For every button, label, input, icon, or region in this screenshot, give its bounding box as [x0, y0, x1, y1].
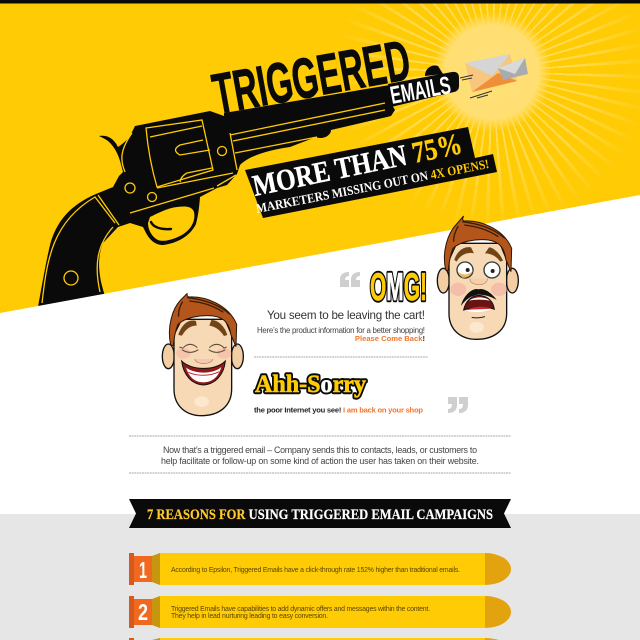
icon: flying envelopes: [460, 54, 528, 98]
trigger: [151, 222, 171, 229]
smiling eyes: [179, 344, 227, 352]
number tab: [129, 553, 134, 585]
cheeks: [176, 348, 231, 359]
bar cap: [485, 638, 499, 640]
heading text: 7 REASONS FOR USING TRIGGERED EMAIL CAMPAIGNS: [147, 507, 493, 523]
text: product information: Here’s the product information for a better shopping!: [257, 326, 425, 335]
laughing mouth: [182, 361, 225, 385]
text: please come back: Please Come Back!: [355, 334, 425, 343]
head: [449, 243, 507, 339]
cheeks: [450, 283, 507, 296]
character: laughing face: [162, 293, 243, 416]
speed lines: [460, 75, 492, 98]
bar: [160, 638, 485, 640]
reason 2: [129, 596, 511, 628]
number tab: [129, 596, 134, 628]
line one: Now that’s a triggered email – Company sends this to contacts, leads, or customers to: [163, 445, 477, 455]
sunburst rays: [341, 4, 640, 223]
bar cap: [485, 596, 511, 628]
headline: more than 75%: MORE THAN 75%: [250, 127, 465, 203]
tab fold: [152, 596, 160, 628]
hair strands: [454, 222, 505, 242]
dashed rule: [129, 472, 511, 474]
section heading banner: [129, 499, 511, 528]
reason text line one: Triggered Emails have capabilities to add dynamic offers and messages within the content.: [171, 606, 430, 613]
nose: [195, 359, 213, 363]
icon: opening quote: [340, 272, 360, 287]
character: worried face: [437, 216, 518, 339]
sun glow: [432, 12, 552, 132]
reason text line two: They help in lead nurturing leading to easy conversion.: [171, 613, 328, 620]
tab fold: [152, 638, 160, 640]
label shape: [388, 65, 459, 107]
number: 1: [139, 557, 147, 583]
label text: EMAILS: [388, 71, 453, 110]
ears: [162, 344, 243, 369]
fill: OMG!: [370, 266, 427, 309]
open mouth: [464, 295, 494, 312]
tab fold: [152, 553, 160, 585]
outline: OMG!: [370, 266, 427, 309]
chin highlight: [194, 396, 209, 407]
dashed divider: [254, 356, 428, 358]
small envelope: [498, 58, 528, 80]
bar cap: [485, 553, 511, 585]
title: EMAILS label: [388, 65, 459, 110]
number tab: [129, 638, 134, 640]
hair: [169, 293, 237, 347]
reason 1: [129, 553, 511, 585]
ribbon: [129, 499, 511, 528]
white lower background: [0, 195, 640, 640]
revolver: [38, 85, 395, 310]
gun silhouette: [38, 85, 395, 310]
banner shape: [245, 127, 497, 218]
fill: Ahh-Sorry: [255, 371, 366, 398]
dashed rule: [129, 435, 511, 437]
title: TRIGGERED: TRIGGERED: [208, 28, 415, 127]
callout: OMG: [370, 266, 427, 309]
lower lip: [472, 317, 485, 318]
ears: [437, 268, 518, 293]
mustache: [461, 289, 497, 306]
nose: [470, 278, 487, 285]
large envelope flap: [465, 54, 510, 76]
headline banner: [245, 127, 497, 218]
head: [174, 319, 232, 416]
eyebrows: [178, 320, 227, 336]
reason 3: [129, 638, 499, 640]
trigger guard opening: [148, 207, 194, 241]
large envelope lower fold: [472, 73, 517, 92]
large envelope body: [465, 54, 517, 92]
top black bar: [0, 0, 640, 4]
bar: [160, 596, 485, 628]
subhead: marketers missing out: MARKETERS MISSING OUT ON 4X OPENS!: [255, 156, 490, 216]
icon: closing quote: [448, 397, 468, 413]
text: leaving the cart: You seem to be leaving the cart!: [267, 309, 425, 322]
small envelope flap: [498, 58, 525, 74]
chin highlight: [469, 322, 484, 333]
right eye: [484, 262, 500, 278]
reason text: According to Epsilon, Triggered Emails have a click-through rate 152% higher than traditional emails.: [171, 567, 460, 574]
line two: help facilitate or follow-up on some kind of action the user has taken on their website.: [161, 456, 479, 466]
left eye: [457, 262, 473, 278]
hair strands: [179, 298, 230, 317]
bar: [160, 553, 485, 585]
eyebrows: [454, 247, 503, 262]
hair: [444, 216, 512, 272]
number: 2: [138, 599, 148, 625]
gun line art: [42, 103, 385, 303]
callout: Ahh-Sorry: [255, 371, 366, 398]
gray section background: [0, 514, 640, 640]
explanation paragraph: [161, 445, 479, 466]
outline: Ahh-Sorry: [255, 371, 366, 398]
text: poor internet: the poor Internet you see! I am back on your shop: [254, 406, 423, 414]
